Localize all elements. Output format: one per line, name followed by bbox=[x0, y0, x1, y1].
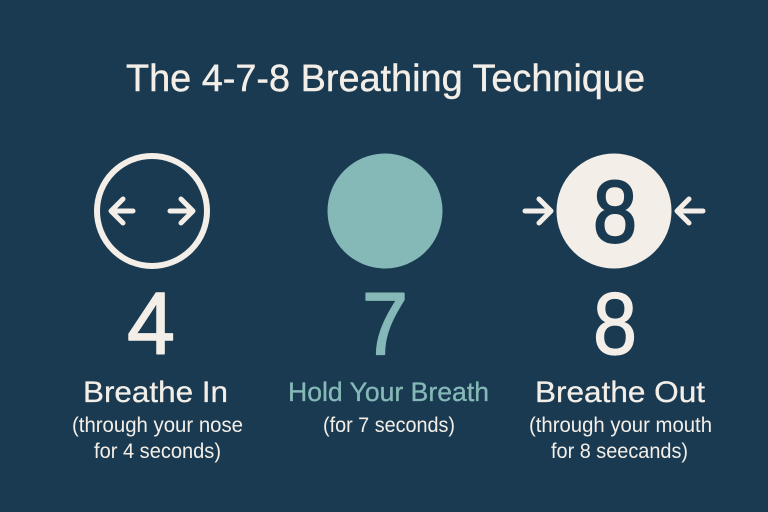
text: for 4 seconds: for 4 seconds) bbox=[94, 440, 221, 463]
heading: breathe out: Breathe Out bbox=[535, 376, 706, 409]
text: for 7 seconds: (for 7 seconds) bbox=[323, 414, 455, 437]
icon: solid circle with 8 and inward arrows bbox=[525, 154, 703, 268]
text: through your nose: (through your nose bbox=[72, 414, 243, 437]
panel: hold your breath bbox=[288, 154, 489, 437]
title: The 4-7-8 Breathing Technique bbox=[126, 58, 645, 100]
number 7: 7 bbox=[362, 274, 408, 373]
heading: breathe in: Breathe In bbox=[83, 376, 228, 409]
number 4: 4 bbox=[127, 274, 175, 373]
number 8: 8 bbox=[593, 274, 637, 373]
panel: breathe in bbox=[72, 156, 243, 463]
heading: hold your breath: Hold Your Breath bbox=[288, 377, 489, 407]
panel: breathe out bbox=[525, 154, 712, 463]
text: through your mouth: (through your mouth bbox=[529, 414, 712, 437]
icon: outlined circle with outward arrows bbox=[97, 156, 207, 266]
icon: solid circle with 8 and inward arrows: 8 bbox=[593, 162, 637, 261]
text: for 8 seconds: for 8 seecands) bbox=[551, 440, 688, 463]
icon: solid teal circle bbox=[328, 154, 442, 268]
